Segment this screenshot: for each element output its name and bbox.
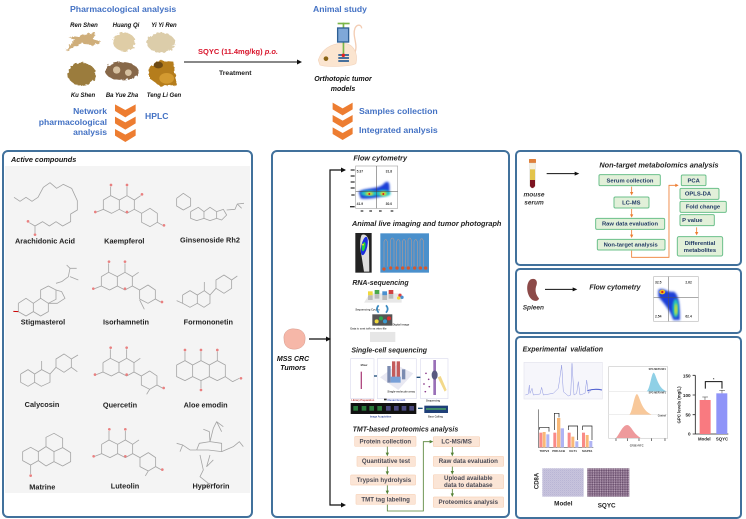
flow boxes: Trypsin hydrolysis	[357, 477, 412, 484]
section: animal live imaging	[351, 219, 502, 273]
compound: arachidonic acid	[14, 183, 77, 245]
compound: ginsenoside Rh2: Ginsenoside Rh2	[180, 236, 240, 245]
treatment arrow: SQYC (11.4mg/kg) p.o.	[198, 47, 278, 56]
compound: calycosin	[21, 354, 78, 409]
flow plot: 32.5	[655, 280, 662, 284]
IHC images: Model	[554, 501, 573, 508]
bar chart: mRNA expression: UGT1	[569, 449, 577, 453]
flow boxes: Raw data evaluation	[439, 458, 498, 465]
herb labels: Ba Yue Zha	[106, 93, 139, 99]
flow histograms: SPC-MEP3-MF1	[649, 369, 667, 371]
arrow	[547, 172, 579, 176]
section: single-cell sequencing: Base Calling	[428, 415, 443, 418]
compound: isorhamnetin	[92, 260, 163, 326]
section: single-cell sequencing: Image Acquisition	[370, 416, 392, 419]
chromatogram	[524, 362, 602, 399]
panel: active compounds	[3, 151, 252, 517]
flow boxes: Quantitative test	[362, 458, 410, 465]
flow plot	[654, 277, 698, 321]
compound: stigmasterol: Stigmasterol	[21, 317, 65, 326]
chevrons: right	[333, 103, 353, 140]
panel: non-target metabolomics	[516, 151, 741, 265]
bar chart: GPC levels: Model	[698, 437, 711, 442]
flow boxes: LC-MS	[622, 200, 641, 206]
bar chart: GPC levels: GPC levels (mg/L)	[677, 386, 682, 424]
compound: matrine	[23, 433, 71, 491]
label: orthotopic tumor models	[314, 76, 373, 93]
bar chart: GPC levels	[677, 373, 728, 442]
section: single-cell sequencing: Library Preparation	[351, 399, 375, 402]
compound: quercetin	[94, 346, 165, 410]
compound: luteolin	[92, 428, 164, 490]
section: single-cell sequencing: Single-molecule array	[387, 389, 415, 393]
compound: quercetin: Quercetin	[103, 401, 138, 410]
panel title: Active compounds	[10, 155, 76, 164]
treatment arrow	[184, 47, 302, 77]
section: flow cytometry: 30.0	[386, 202, 392, 206]
flow arrows	[630, 184, 698, 257]
compound: luteolin: Luteolin	[111, 481, 140, 490]
treatment arrow: Treatment	[219, 70, 252, 77]
icon: tumor	[284, 329, 305, 349]
chevrons: left	[115, 104, 136, 142]
section: flow cytometry: Flow cytometry	[353, 153, 408, 162]
label: network pharmacological analysis	[39, 106, 107, 137]
flow histograms: Control	[658, 415, 666, 418]
section: flow cytometry: 41.9	[357, 202, 363, 206]
bar chart: mRNA expression	[538, 409, 593, 453]
label: integrated analysis: Integrated analysis	[359, 125, 438, 135]
flow boxes: Differential	[685, 241, 716, 247]
title: Experimental validation	[523, 346, 603, 353]
compound: matrine: Matrine	[29, 482, 55, 491]
flow plot: 2.54	[655, 315, 662, 319]
panel: integrated analysis	[272, 151, 509, 517]
herb labels: Ku Shen	[71, 93, 95, 99]
compound: formononetin	[177, 275, 237, 326]
label: HPLC: HPLC	[145, 111, 168, 121]
label: mouse serum: serum	[524, 200, 544, 207]
section: RNA-sequencing: Data is sent to/fo ex vitro file	[350, 326, 387, 330]
flow boxes: TMT tag labeling	[361, 496, 410, 503]
flow boxes: Non-target analysis	[604, 243, 658, 249]
label: MSS CRC tumors: MSS CRC	[277, 356, 310, 363]
section: RNA-sequencing: Digital image	[393, 323, 410, 327]
bar chart: mRNA expression: MAPK1	[582, 449, 593, 453]
flow boxes: Proteomics analysis	[439, 499, 499, 506]
heading: animal study: Animal study	[313, 4, 367, 14]
bar chart: GPC levels: 150	[683, 373, 691, 378]
section: single-cell sequencing: Mixer	[361, 363, 368, 367]
herb labels: Yi Yi Ren	[151, 23, 177, 29]
icon: serum tube	[529, 159, 536, 188]
section: single-cell sequencing: Single-cell sequencing	[351, 348, 428, 355]
compound: formononetin: Formononetin	[184, 317, 233, 326]
herb labels: Teng Li Gen	[147, 93, 182, 99]
section: TMT-based proteomics	[351, 427, 504, 511]
bar chart: GPC levels: 50	[685, 412, 691, 417]
branching arrows	[309, 168, 346, 508]
section: single-cell sequencing	[351, 348, 448, 419]
flow boxes: PCA	[687, 178, 701, 184]
label: samples collection: Samples collection	[359, 106, 438, 116]
section: RNA-sequencing: RNA-sequencing	[352, 280, 409, 287]
flow plot: 2.62	[685, 280, 692, 284]
flow boxes: Serum collection	[607, 178, 654, 184]
flow boxes	[351, 436, 504, 507]
compound: stigmasterol	[13, 265, 78, 326]
flow boxes: Upload available	[444, 475, 493, 482]
label: network pharmacological analysis: analysis	[73, 127, 107, 137]
section: flow cytometry: 31.8	[386, 170, 392, 174]
flow boxes: metabolites	[684, 248, 716, 254]
label: mouse serum	[524, 191, 545, 207]
section: RNA-sequencing: Sequencing Cycles	[355, 307, 380, 311]
label: network pharmacological analysis: pharmacological	[39, 117, 107, 127]
flow boxes: Raw data evaluation	[602, 222, 658, 228]
flow plot: 62.4	[685, 315, 692, 319]
label: spleen: Spleen	[523, 304, 544, 311]
IHC images: SQYC	[598, 502, 616, 509]
section: flow cytometry: 5.37	[357, 170, 363, 174]
panel: experimental validation	[516, 337, 741, 518]
label: MSS CRC tumors	[277, 356, 310, 372]
icon: spleen	[527, 279, 539, 301]
section: TMT-based proteomics: TMT-based proteomics analysis	[353, 427, 458, 434]
herb labels	[70, 23, 182, 99]
label: orthotopic tumor models: Orthotopic tumor	[314, 76, 373, 83]
herb labels: Huang Qi	[113, 23, 140, 29]
flow boxes: LC-MS/MS	[441, 439, 472, 446]
herb images	[66, 32, 177, 86]
bar chart: mRNA expression: PRKACB	[552, 449, 566, 453]
IHC images: CD8A	[534, 472, 540, 489]
herbs	[66, 23, 182, 99]
panel: spleen	[516, 269, 741, 333]
flow boxes: data to database	[444, 482, 493, 489]
arrow	[545, 287, 577, 291]
flow histograms: SPC-MEP3-MF1	[649, 392, 667, 394]
flow boxes: Protein collection	[359, 438, 411, 445]
compound: hyperforin	[177, 422, 243, 491]
bar chart: GPC levels: SQYC	[716, 437, 728, 442]
flow histograms: CFSE-FITC	[630, 444, 644, 448]
section: animal live imaging: Animal live imaging and tumor photograph	[351, 219, 502, 228]
compound: isorhamnetin: Isorhamnetin	[103, 317, 150, 326]
compound: aloe emodin: Aloe emodin	[184, 401, 228, 410]
flow boxes: OPLS-DA	[685, 192, 712, 198]
bar chart: GPC levels: *	[713, 377, 715, 382]
section: RNA-sequencing	[350, 280, 410, 342]
flow boxes: Fold change	[686, 205, 721, 211]
compound: ginsenoside Rh2	[177, 193, 244, 245]
label: mouse serum: mouse	[524, 191, 545, 198]
herb labels: Ren Shen	[70, 23, 98, 29]
flow boxes	[596, 175, 726, 256]
title: Non-target metabolomics analysis	[599, 161, 719, 170]
section: single-cell sequencing: Cluster Growth	[387, 399, 406, 402]
compound: calycosin: Calycosin	[25, 400, 60, 409]
label: orthotopic tumor models: models	[331, 86, 355, 93]
compound: kaempferol	[94, 184, 165, 245]
compound: kaempferol: Kaempferol	[104, 236, 144, 245]
heading: pharmacological analysis: Pharmacological analysis	[70, 4, 176, 14]
bar chart: GPC levels: 0	[688, 432, 691, 437]
bar chart: mRNA expression: TRPV3	[540, 449, 549, 453]
bar chart: GPC levels: 100	[683, 393, 691, 398]
section: flow cytometry	[350, 153, 408, 211]
compound: arachidonic acid: Arachidonic Acid	[15, 236, 75, 245]
title: Flow cytometry	[589, 285, 642, 292]
label: network pharmacological analysis: Network	[73, 106, 107, 116]
flow arrows	[386, 440, 454, 511]
flow histograms	[609, 367, 668, 448]
section: single-cell sequencing: Sequencing	[426, 399, 441, 402]
compound: aloe emodin	[177, 349, 242, 410]
compound: hyperforin: Hyperforin	[192, 482, 230, 491]
IHC images	[534, 468, 629, 509]
flow boxes: P value	[682, 218, 703, 224]
label: MSS CRC tumors: Tumors	[280, 365, 306, 372]
icon: mouse with syringe	[318, 23, 362, 66]
